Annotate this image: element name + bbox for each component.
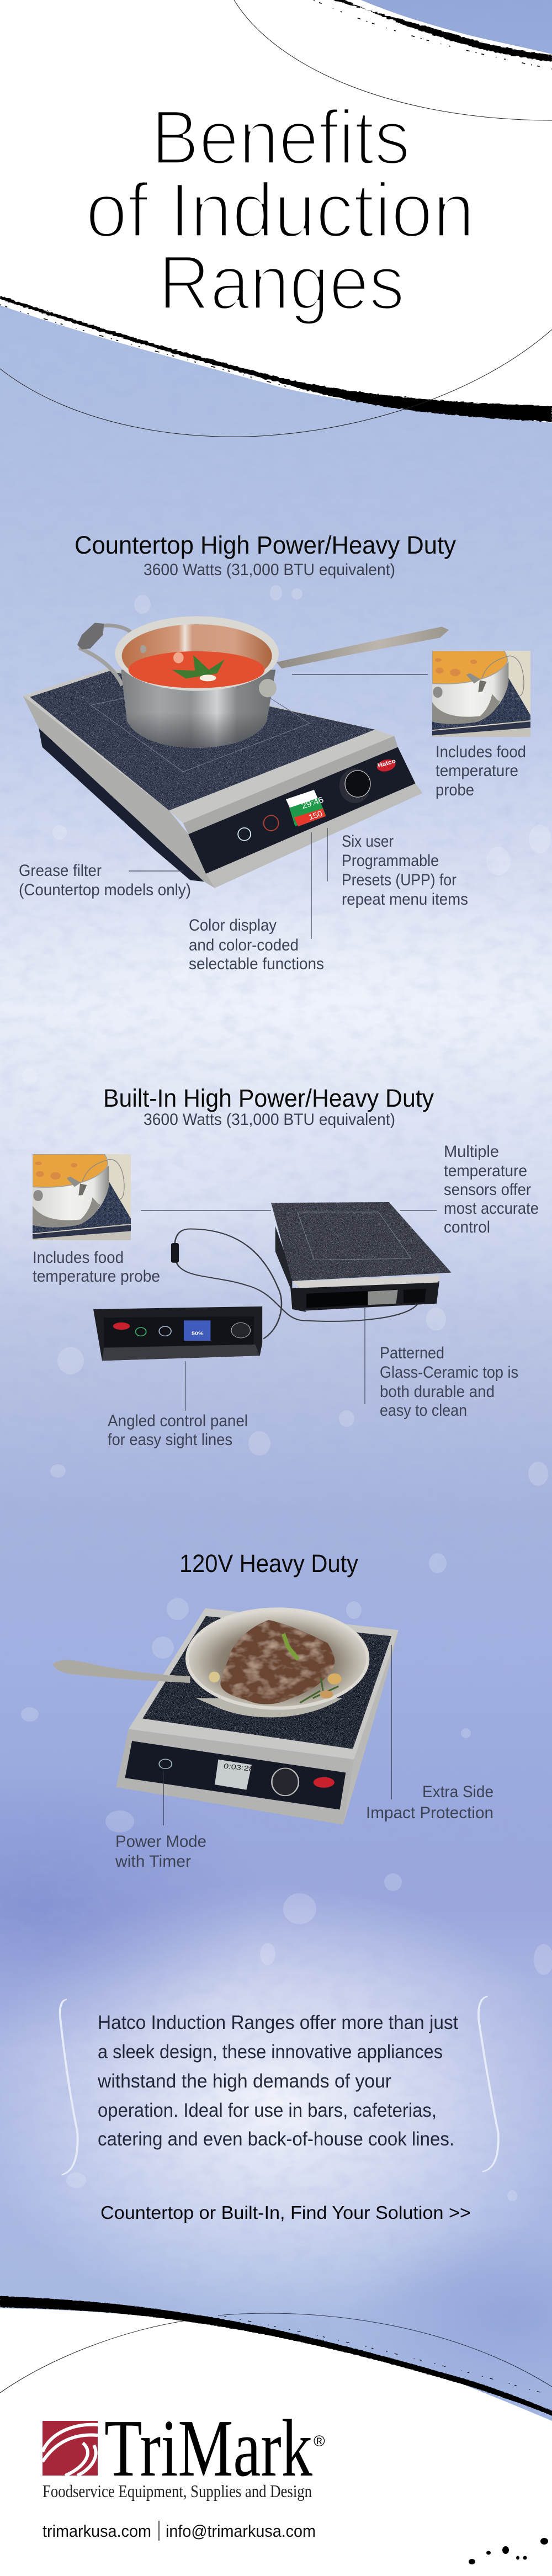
- title: Benefits: [151, 94, 410, 180]
- logo mark: [43, 2421, 98, 2476]
- callout: probe: probe: [436, 781, 474, 799]
- white footer shape: [0, 2308, 552, 2576]
- callout line: top: [364, 1308, 365, 1404]
- callout line: control panel: [184, 1361, 185, 1411]
- heading: built-in: Built-In High Power/Heavy Duty: [103, 1084, 434, 1112]
- callout: glass-ceramic top: Patterned: [380, 1344, 444, 1362]
- product: countertop range with soup pot: [23, 616, 449, 888]
- product: 120V range with steak pan: 0:03:28: [223, 1762, 254, 1773]
- panel: countertop high power: [19, 531, 530, 973]
- callout: probe: [436, 743, 526, 799]
- title: Ranges: [158, 239, 405, 326]
- product: countertop range with soup pot: 29:46: [300, 795, 325, 811]
- contact line: info@trimarkusa.com: [166, 2521, 316, 2541]
- callout line: sensors: [400, 1210, 437, 1211]
- logo wordmark: TriMark: [104, 2403, 312, 2494]
- ink splatter: [469, 2538, 548, 2564]
- callout: control panel: [108, 1412, 248, 1449]
- paragraph: catering and even back-of-house cook lines.: [98, 2128, 454, 2150]
- title: [86, 94, 475, 326]
- callout: glass-ceramic top: [380, 1344, 518, 1420]
- paragraph: Hatco Induction Ranges offer more than just: [98, 2012, 458, 2033]
- subheading: watts: 3600 Watts (31,000 BTU equivalent): [144, 561, 395, 579]
- callout: power mode: with Timer: [115, 1852, 191, 1871]
- callout: sensors: Multiple: [444, 1143, 499, 1161]
- callout: probe: temperature: [436, 762, 518, 780]
- callout: power mode: Power Mode: [115, 1833, 206, 1851]
- callout: display: and color-coded: [189, 936, 299, 954]
- callout: glass-ceramic top: both durable and: [380, 1383, 495, 1401]
- callout: grease filter: (Countertop models only): [19, 881, 191, 899]
- product: countertop range with soup pot: 150: [307, 810, 324, 822]
- callout: sensors: most accurate: [444, 1199, 539, 1218]
- product: built-in range and control panel: 50%: [192, 1331, 204, 1336]
- callout line: probe: [292, 674, 428, 675]
- callout: built-in probe: temperature probe: [33, 1267, 160, 1286]
- callout line: probe: [141, 1210, 271, 1211]
- paragraph: a sleek design, these innovative appliances: [98, 2041, 443, 2063]
- inset photo: built-in probe: [33, 1154, 131, 1240]
- white header shape: [0, 0, 552, 423]
- bracket: left: [60, 1999, 78, 2175]
- callout: built-in probe: [33, 1249, 160, 1286]
- callout line: grease filter: [129, 870, 183, 872]
- footer brush stroke and arc: [0, 2296, 552, 2416]
- panel: summary paragraph: [60, 1996, 498, 2223]
- callout: probe: Includes food: [436, 743, 526, 761]
- product: 120V range with steak pan: [53, 1607, 399, 1825]
- callout: presets: Programmable: [342, 852, 439, 870]
- callout: grease filter: Grease filter: [19, 862, 102, 880]
- callout line: presets: [327, 828, 328, 881]
- heading: 120V: 120V Heavy Duty: [179, 1549, 358, 1578]
- product: built-in range and control panel: [93, 1202, 452, 1361]
- contact line: [43, 2521, 316, 2541]
- callout: presets: Six user: [342, 832, 394, 851]
- callout: side protection: Extra Side: [422, 1783, 493, 1801]
- callout line: side protection: [391, 1645, 392, 1799]
- product: countertop range with soup pot: Hatco: [377, 758, 397, 769]
- callout: sensors: sensors offer: [444, 1181, 531, 1199]
- callout line: power mode: [163, 1771, 164, 1825]
- callout: display: [189, 916, 324, 973]
- callout: control panel: for easy sight lines: [108, 1431, 232, 1449]
- callout: glass-ceramic top: Glass-Ceramic top is: [380, 1363, 518, 1382]
- callout: built-in probe: Includes food: [33, 1249, 124, 1267]
- header brush strokes and thin arcs: [0, 0, 552, 437]
- callout: grease filter: [19, 862, 191, 899]
- callout: sensors: [444, 1143, 539, 1236]
- panel: 120V heavy duty: [53, 1549, 493, 1871]
- subheading: built-in watts: 3600 Watts (31,000 BTU equivalent): [144, 1111, 395, 1129]
- callout: presets: repeat menu items: [342, 890, 468, 909]
- callout: side protection: Impact Protection: [366, 1804, 493, 1822]
- callout: sensors: control: [444, 1218, 490, 1236]
- tagline: Foodservice Equipment, Supplies and Design: [43, 2481, 312, 2501]
- callout: presets: [342, 832, 468, 909]
- callout: side protection: [366, 1783, 493, 1822]
- title: of Induction: [86, 167, 475, 253]
- inset photo: food temperature probe: [432, 651, 530, 737]
- paragraph: withstand the high demands of your: [97, 2070, 391, 2092]
- contact line: trimarkusa.com: [43, 2521, 151, 2541]
- callout: control panel: Angled control panel: [108, 1412, 248, 1430]
- callout line: display: [311, 832, 312, 939]
- bracket: right: [479, 1996, 498, 2171]
- heading: countertop: Countertop High Power/Heavy Duty: [75, 531, 456, 559]
- callout: display: Color display: [189, 916, 277, 934]
- panel: built-in high power: [33, 1084, 539, 1449]
- paragraph: operation. Ideal for use in bars, cafeterias,: [98, 2100, 437, 2121]
- callout: power mode: [115, 1833, 206, 1871]
- paragraph: [97, 2012, 458, 2150]
- callout: presets: Presets (UPP) for: [342, 871, 457, 889]
- callout: display: selectable functions: [189, 955, 324, 973]
- callout: glass-ceramic top: easy to clean: [380, 1401, 467, 1420]
- callout: sensors: temperature: [444, 1162, 527, 1180]
- logo: TriMark: [43, 2403, 325, 2501]
- call to action: Countertop or Built-In, Find Your Solution >>: [100, 2202, 471, 2223]
- registered mark: ®: [314, 2432, 325, 2450]
